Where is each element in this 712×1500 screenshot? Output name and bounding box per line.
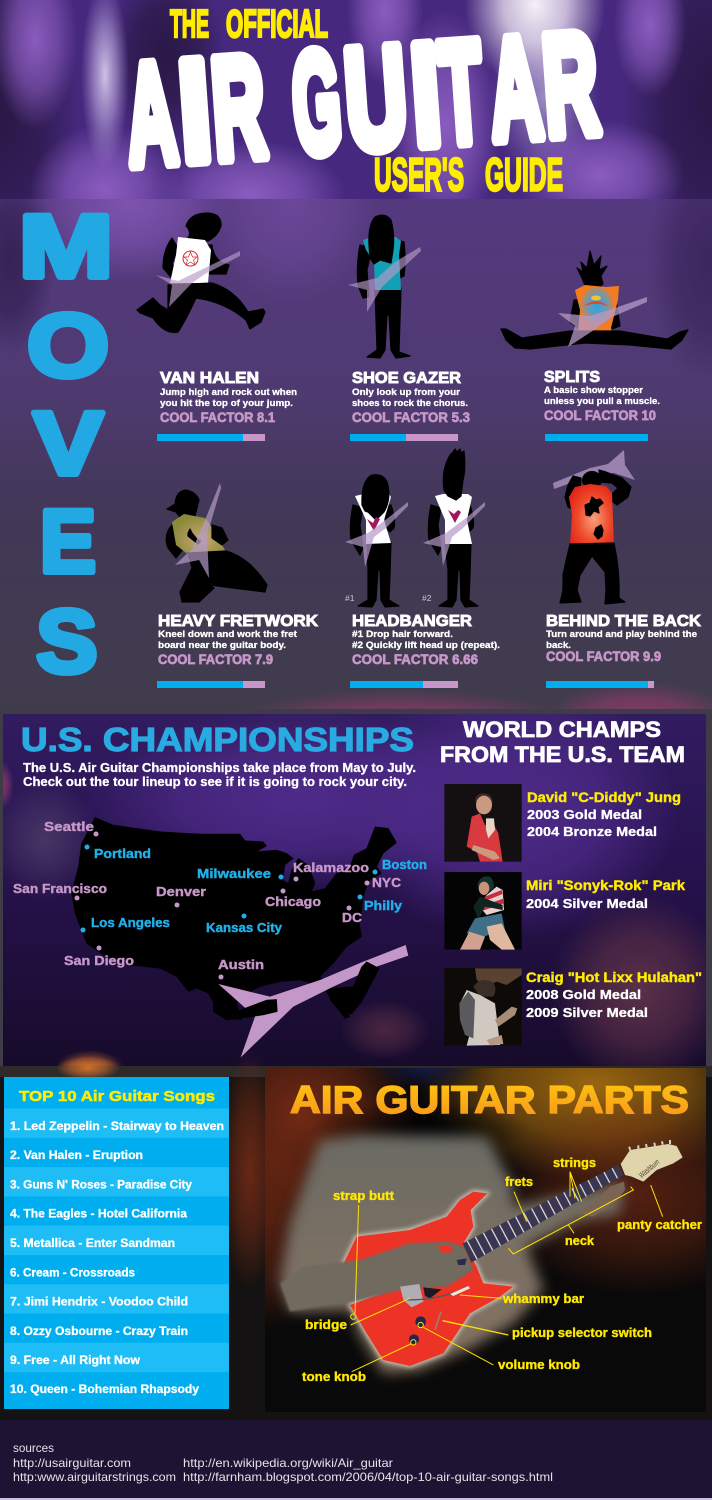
heading: MOVES vertical letters: S bbox=[36, 591, 97, 691]
part labels: bridge bbox=[305, 1318, 347, 1332]
intro text: Check out the tour lineup to see if it is going to rock your city. bbox=[23, 774, 407, 789]
heading: U.S. Championships: U.S. CHAMPIONSHIPS bbox=[21, 721, 414, 758]
bridge and hardware bbox=[400, 1284, 470, 1344]
city labels: Seattle bbox=[44, 819, 94, 834]
city markers bbox=[74, 832, 378, 980]
move: Behind the Back bbox=[546, 450, 701, 688]
illustration: guitarist with red guitar bbox=[280, 1135, 683, 1373]
description bbox=[160, 387, 297, 409]
heading: Air Guitar Parts: AIR GUITAR PARTS bbox=[290, 1079, 689, 1122]
song rows bbox=[4, 1108, 229, 1396]
guitar body bbox=[343, 1192, 513, 1366]
headstock bbox=[621, 1140, 683, 1182]
song rows: 8. Ozzy Osbourne - Crazy Train bbox=[10, 1326, 188, 1338]
part labels: volume knob bbox=[498, 1358, 580, 1372]
move: Van Halen bbox=[137, 213, 297, 441]
description: A basic show stopper bbox=[544, 385, 643, 396]
name and medal: Miri "Sonyk-Rok" Park bbox=[526, 878, 686, 893]
name and medals: 2004 Bronze Medal bbox=[527, 824, 657, 839]
footer: sources: http://en.wikipedia.org/wiki/Air_guitar bbox=[183, 1456, 393, 1470]
fretboard bbox=[463, 1165, 623, 1263]
song rows: 9. Free - All Right Now bbox=[10, 1355, 140, 1367]
heading: World Champs: WORLD CHAMPS bbox=[463, 717, 661, 742]
heading: SPLITS bbox=[544, 369, 600, 386]
title line: The Official bbox=[170, 3, 328, 46]
heading: MOVES vertical letters bbox=[19, 196, 113, 691]
label: #2: #2 bbox=[422, 593, 432, 603]
part labels: neck bbox=[565, 1234, 594, 1248]
title line: Air Guitar bbox=[121, 4, 604, 196]
title line: Air Guitar: I bbox=[174, 31, 216, 192]
description: #2 Quickly lift head up (repeat). bbox=[352, 640, 500, 651]
name and medals: 2003 Gold Medal bbox=[527, 807, 642, 822]
bar chart: cool factor 8.1 bbox=[157, 434, 265, 441]
intro text: The U.S. Air Guitar Championships take place from May to July. bbox=[23, 760, 416, 775]
description: Kneel down and work the fret bbox=[158, 629, 298, 640]
cool factor: COOL FACTOR 6.66 bbox=[352, 652, 478, 667]
bar chart: cool factor 10 bbox=[545, 434, 648, 441]
cool factor: COOL FACTOR 5.3 bbox=[352, 410, 470, 425]
description bbox=[352, 629, 500, 651]
song rows: 1. Led Zeppelin - Stairway to Heaven bbox=[10, 1121, 224, 1133]
name and medal: 2004 Silver Medal bbox=[526, 896, 648, 911]
heading: BEHIND THE BACK bbox=[546, 613, 701, 630]
city labels: Kalamazoo bbox=[293, 860, 369, 875]
heading: World Champs bbox=[440, 717, 685, 767]
song rows: 6. Cream - Crossroads bbox=[10, 1268, 135, 1280]
city labels: Austin bbox=[218, 957, 264, 972]
title line: Air Guitar: R bbox=[207, 27, 270, 190]
figure: Behind the Back bbox=[553, 450, 635, 604]
part labels: whammy bar bbox=[502, 1292, 584, 1306]
heading: VAN HALEN bbox=[160, 370, 259, 387]
description: unless you pull a muscle. bbox=[544, 396, 660, 407]
part labels: frets bbox=[505, 1175, 533, 1189]
champ: Craig Hulahan bbox=[444, 968, 702, 1046]
figure: Headbanger position 1 bbox=[345, 475, 408, 607]
part labels: tone knob bbox=[302, 1370, 366, 1384]
city labels: San Francisco bbox=[13, 881, 107, 896]
description bbox=[544, 385, 660, 407]
footer: sources: http:www.airguitarstrings.com bbox=[13, 1470, 176, 1484]
song rows: 4. The Eagles - Hotel California bbox=[10, 1208, 188, 1220]
city labels: NYC bbox=[372, 875, 402, 890]
song rows: 5. Metallica - Enter Sandman bbox=[10, 1238, 175, 1250]
heading: MOVES vertical letters: M bbox=[19, 196, 113, 296]
description bbox=[546, 629, 697, 651]
part labels: strap butt bbox=[333, 1189, 395, 1203]
name and medals: 2009 Silver Medal bbox=[526, 1005, 648, 1020]
name and medals bbox=[526, 970, 702, 1020]
cool factor: COOL FACTOR 7.9 bbox=[158, 652, 273, 667]
song rows: 10. Queen - Bohemian Rhapsody bbox=[10, 1384, 200, 1396]
heading: Top 10: TOP 10 Air Guitar Songs bbox=[19, 1088, 215, 1105]
title line: The Official: OFFICIAL bbox=[226, 3, 328, 46]
move: Splits bbox=[501, 251, 688, 441]
title line: Air Guitar: A bbox=[121, 34, 181, 196]
description: shoes to rock the chorus. bbox=[352, 398, 468, 409]
description bbox=[158, 629, 298, 651]
city labels: Los Angeles bbox=[91, 915, 170, 930]
guitar halo bbox=[343, 1192, 513, 1366]
title line: Air Guitar: T bbox=[435, 12, 488, 174]
description: Jump high and rock out when bbox=[160, 387, 297, 398]
title line: Air Guitar: R bbox=[538, 4, 604, 167]
bar chart: cool factor 9.9 bbox=[546, 681, 654, 688]
city labels: San Diego bbox=[64, 953, 134, 968]
description: #1 Drop hair forward. bbox=[352, 629, 453, 640]
part labels: panty catcher bbox=[617, 1218, 702, 1232]
title line: User's Guide: GUIDE bbox=[485, 148, 563, 200]
part labels bbox=[302, 1156, 702, 1384]
city labels: Kansas City bbox=[206, 920, 283, 935]
photo: Miri Park bbox=[444, 872, 522, 950]
cool factor: COOL FACTOR 9.9 bbox=[546, 649, 661, 664]
map: United States bbox=[72, 817, 397, 1020]
icon: flying V guitar with arms bbox=[213, 945, 408, 1057]
city labels: DC bbox=[342, 910, 363, 925]
figure: Headbanger position 2 bbox=[423, 449, 485, 607]
headstock: Washburn bbox=[637, 1157, 662, 1180]
label: #1: #1 bbox=[345, 593, 355, 603]
description: you hit the top of your jump. bbox=[160, 398, 293, 409]
footer: sources: http://farnham.blogspot.com/2006/04/top-10-air-guitar-songs.html bbox=[183, 1470, 553, 1484]
hand and forearm bbox=[280, 1242, 473, 1312]
heading: World Champs: FROM THE U.S. TEAM bbox=[440, 742, 685, 767]
part labels: pickup selector switch bbox=[512, 1326, 652, 1340]
name and medals: David "C-Diddy" Jung bbox=[527, 790, 681, 805]
heading: MOVES vertical letters: O bbox=[27, 295, 109, 395]
move: Headbanger bbox=[345, 449, 500, 688]
title line: Air Guitar: A bbox=[484, 8, 547, 170]
title line: The Official: THE bbox=[170, 3, 209, 46]
description: board near the guitar body. bbox=[158, 640, 286, 651]
title line: Air Guitar: I bbox=[406, 15, 445, 176]
figure: Van Halen jump bbox=[137, 213, 265, 332]
description bbox=[352, 387, 468, 409]
city labels: Milwaukee bbox=[197, 866, 271, 881]
description: back. bbox=[546, 640, 571, 651]
city labels: Chicago bbox=[265, 894, 321, 909]
photo: David Jung bbox=[444, 784, 522, 862]
song rows: 7. Jimi Hendrix - Voodoo Child bbox=[10, 1296, 188, 1308]
song rows: 2. Van Halen - Eruption bbox=[10, 1150, 143, 1162]
city labels: Philly bbox=[364, 898, 403, 913]
champ: Miri Park bbox=[444, 872, 686, 950]
song rows: 3. Guns N' Roses - Paradise City bbox=[10, 1180, 193, 1192]
move: Shoe Gazer bbox=[348, 215, 470, 441]
panel: top 10 air guitar songs bbox=[4, 1077, 229, 1409]
panel: moves bbox=[0, 199, 712, 709]
name and medals: Craig "Hot Lixx Hulahan" bbox=[526, 970, 702, 985]
photo: Craig Hulahan bbox=[444, 968, 522, 1046]
title line: Air Guitar: G bbox=[287, 22, 346, 184]
footer: sources: http://usairguitar.com bbox=[13, 1456, 131, 1470]
footer: sources: sources bbox=[13, 1441, 54, 1455]
heading: HEAVY FRETWORK bbox=[158, 613, 318, 630]
move: Heavy Fretwork bbox=[157, 483, 318, 688]
city labels: Portland bbox=[94, 846, 151, 861]
panel: air guitar parts bbox=[265, 1068, 706, 1412]
bar chart: cool factor 7.9 bbox=[157, 681, 265, 688]
city labels bbox=[13, 819, 427, 972]
footer: sources bbox=[0, 1420, 712, 1500]
champ: David Jung bbox=[444, 784, 681, 862]
heading: HEADBANGER bbox=[352, 613, 472, 630]
figure: Splits bbox=[501, 251, 688, 349]
cool factor: COOL FACTOR 10 bbox=[544, 408, 656, 423]
torso and arms bbox=[280, 1135, 623, 1373]
leader lines bbox=[351, 1172, 663, 1372]
figure: Shoe Gazer bbox=[348, 215, 421, 358]
name and medals: 2008 Gold Medal bbox=[526, 987, 641, 1002]
stage lights header background bbox=[0, 0, 712, 199]
title bbox=[121, 3, 604, 200]
heading: SHOE GAZER bbox=[352, 370, 461, 387]
lower section background bbox=[0, 1050, 712, 1420]
city labels: Boston bbox=[382, 857, 427, 872]
name and medals bbox=[527, 790, 681, 839]
panel: U.S. championships bbox=[3, 714, 706, 1066]
heading: MOVES vertical letters: V bbox=[34, 393, 103, 493]
name and medal bbox=[526, 878, 686, 911]
title line: Air Guitar: U bbox=[340, 18, 412, 180]
city labels: Denver bbox=[156, 884, 206, 899]
fretting hand bbox=[577, 1182, 625, 1217]
description: Only look up from your bbox=[352, 387, 460, 398]
description: Turn around and play behind the bbox=[546, 629, 697, 640]
part labels: strings bbox=[553, 1156, 596, 1170]
bar chart: cool factor 6.66 bbox=[350, 681, 458, 688]
title line: User's Guide: USER'S bbox=[374, 148, 464, 200]
bar chart: cool factor 5.3 bbox=[350, 434, 458, 441]
intro text bbox=[23, 760, 416, 789]
heading: MOVES vertical letters: E bbox=[40, 491, 96, 591]
figure: Heavy Fretwork bbox=[166, 483, 267, 602]
cool factor: COOL FACTOR 8.1 bbox=[160, 410, 275, 425]
